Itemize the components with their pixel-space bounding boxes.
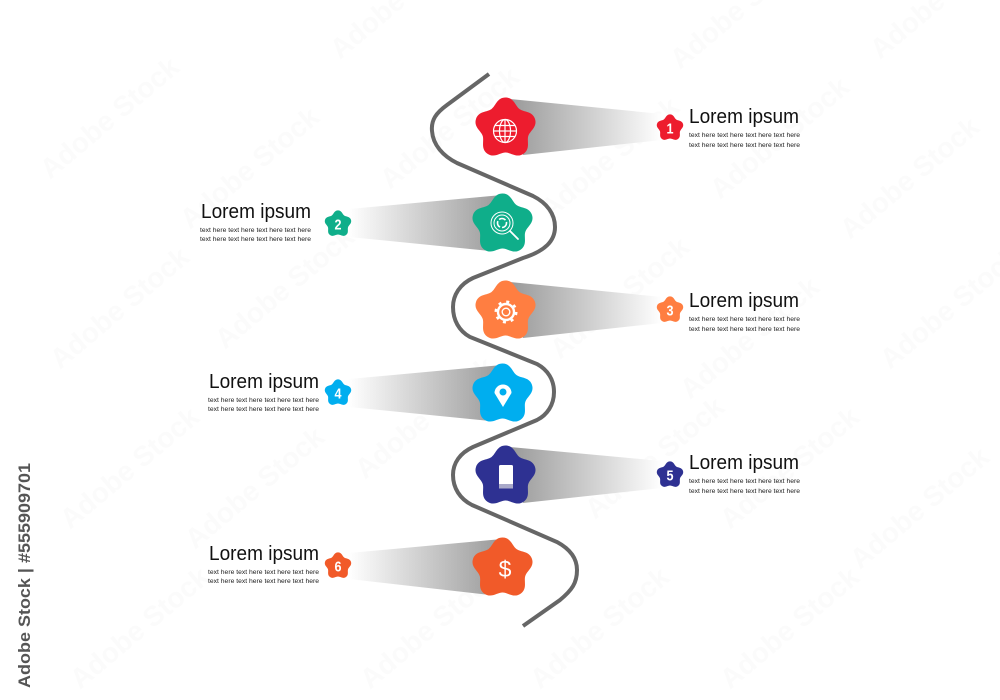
large star 3	[475, 280, 536, 339]
step 3	[475, 280, 800, 339]
step 5	[475, 446, 800, 504]
watermark pattern: Adobe Stock	[844, 441, 995, 575]
beam 5	[510, 447, 662, 503]
text block 1	[689, 106, 800, 149]
text block 4	[208, 371, 319, 413]
icon: smartphone	[499, 465, 513, 488]
icon: dollar sign: $	[499, 556, 512, 582]
text block 2: text here text here text here text here	[200, 236, 311, 243]
small star 4 with number	[325, 379, 351, 405]
watermark pattern: Adobe Stock	[34, 51, 185, 185]
watermark pattern: Adobe Stock	[54, 401, 205, 535]
watermark pattern: Adobe Stock	[714, 561, 865, 695]
watermark pattern: Adobe Stock	[714, 401, 865, 535]
text block 3: text here text here text here text here	[689, 316, 800, 323]
text block 1: Lorem ipsum	[689, 106, 799, 128]
watermark pattern: Adobe Stock	[209, 221, 360, 355]
text block 5: Lorem ipsum	[689, 452, 799, 474]
watermark pattern: Adobe Stock	[349, 351, 500, 485]
beam 4	[349, 365, 502, 421]
text block 2	[200, 201, 311, 243]
text block 3: Lorem ipsum	[689, 290, 799, 312]
large star 1	[475, 98, 536, 156]
text block 6: text here text here text here text here	[208, 578, 319, 585]
beam 3	[510, 282, 662, 338]
watermark pattern: Adobe Stock	[544, 231, 695, 365]
small star 6 with number: 6	[334, 558, 342, 576]
small star 3 with number	[657, 296, 683, 322]
text block 3: text here text here text here text here	[689, 326, 800, 333]
small star 6 with number	[325, 552, 351, 578]
step 1	[475, 98, 800, 156]
small star 1 with number: 1	[666, 120, 674, 138]
text block 6	[208, 543, 319, 585]
small star 2 with number	[325, 210, 351, 236]
large star 2	[472, 194, 533, 252]
text block 6: Lorem ipsum	[209, 543, 319, 565]
watermark pattern: Adobe Stock	[674, 271, 825, 405]
icon: map pin	[494, 384, 512, 407]
beam 1	[510, 99, 662, 155]
small star 5 with number: 5	[666, 468, 674, 484]
text block 5	[689, 452, 800, 495]
watermark pattern: Adobe Stock	[64, 561, 215, 695]
text block 5: text here text here text here text here	[689, 488, 800, 495]
large star 6	[472, 538, 533, 596]
text block 5: text here text here text here text here	[689, 478, 800, 485]
small star 1 with number	[657, 114, 683, 140]
winding road line	[432, 74, 577, 626]
small star 3 with number: 3	[666, 302, 674, 320]
watermark pattern: Adobe Stock	[579, 391, 730, 525]
small star 2 with number: 2	[334, 216, 342, 234]
text block 4: Lorem ipsum	[209, 371, 319, 393]
beam 2	[349, 195, 502, 251]
large star 4	[472, 364, 533, 422]
text block 4: text here text here text here text here	[208, 397, 319, 404]
text block 4: text here text here text here text here	[208, 406, 319, 413]
text block 1: text here text here text here text here	[689, 142, 800, 149]
watermark pattern: Adobe Stock	[179, 421, 330, 555]
icon: magnifier	[491, 212, 518, 239]
step 6	[208, 538, 533, 596]
watermark pattern: Adobe Stock	[374, 61, 525, 195]
icon: gear	[496, 302, 516, 322]
vertical stock credit: Adobe Stock | #555909701	[15, 463, 34, 688]
watermark pattern: Adobe Stock	[174, 101, 325, 235]
small star 5 with number	[657, 461, 683, 487]
text block 2: Lorem ipsum	[201, 201, 311, 223]
watermark pattern: Adobe Stock	[834, 111, 985, 245]
large star 5	[475, 446, 536, 504]
step 4	[208, 364, 533, 422]
watermark pattern: Adobe Stock	[44, 241, 195, 375]
beam 6	[349, 539, 502, 595]
text block 1: text here text here text here text here	[689, 132, 800, 139]
text block 6: text here text here text here text here	[208, 569, 319, 576]
watermark pattern: Adobe Stock	[534, 91, 685, 225]
step 2	[200, 194, 533, 252]
watermark pattern: Adobe Stock	[704, 71, 855, 205]
small star 4 with number: 4	[334, 386, 342, 402]
icon: globe	[494, 120, 516, 142]
watermark pattern: Adobe Stock	[354, 561, 505, 695]
text block 3	[689, 290, 800, 333]
watermark pattern: Adobe Stock	[524, 561, 675, 695]
text block 2: text here text here text here text here	[200, 227, 311, 234]
